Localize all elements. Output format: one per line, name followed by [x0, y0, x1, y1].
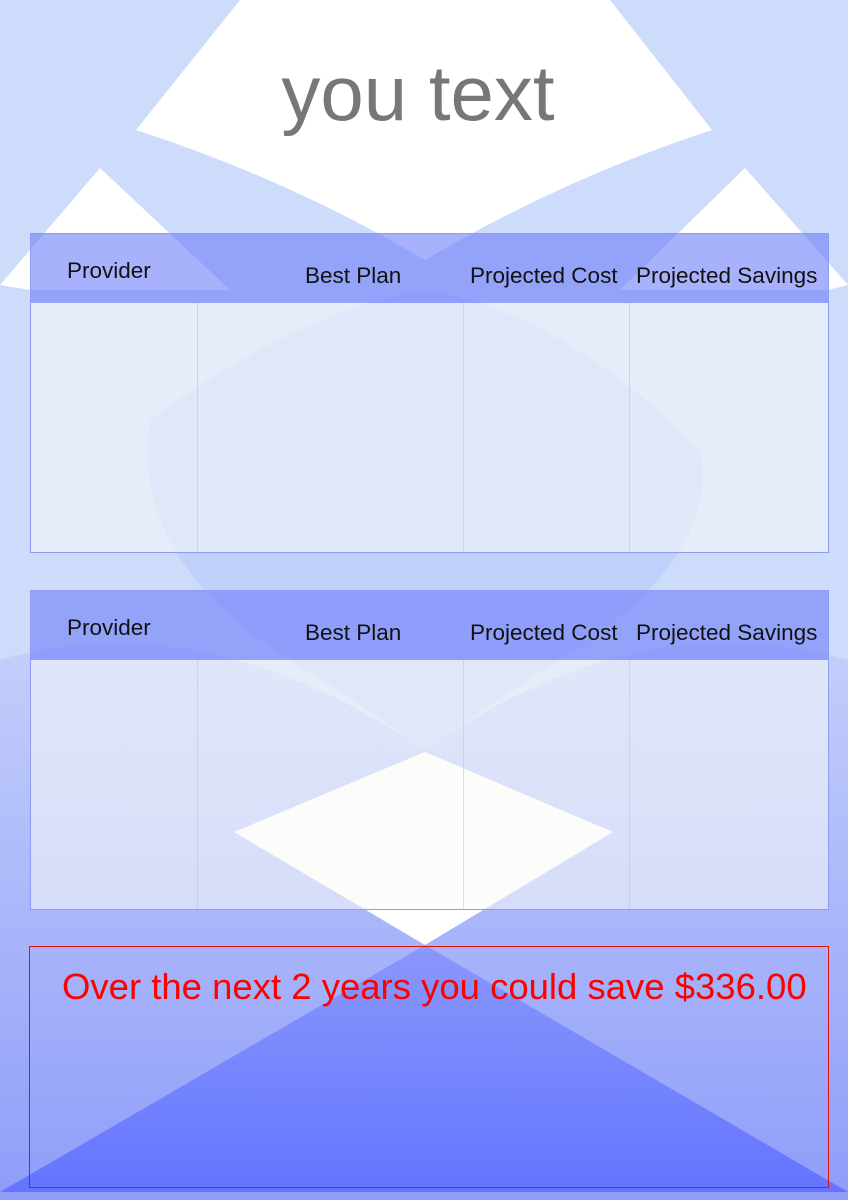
table 1 — [30, 233, 829, 553]
header labels: Provider — [67, 615, 151, 640]
header labels: Provider — [67, 258, 151, 283]
table 2 — [30, 590, 829, 910]
table 2: Best Plan — [305, 620, 401, 645]
table 1: Best Plan — [305, 263, 401, 288]
table 2: Projected Cost — [470, 620, 618, 645]
table 2: Projected Savings — [636, 620, 817, 645]
table 1: Projected Savings — [636, 263, 817, 288]
table 1: Projected Cost — [470, 263, 618, 288]
savings callout: Over the next 2 years you could save $336.00 — [62, 966, 807, 1007]
savings callout — [29, 946, 829, 1188]
title: you text — [281, 49, 555, 137]
